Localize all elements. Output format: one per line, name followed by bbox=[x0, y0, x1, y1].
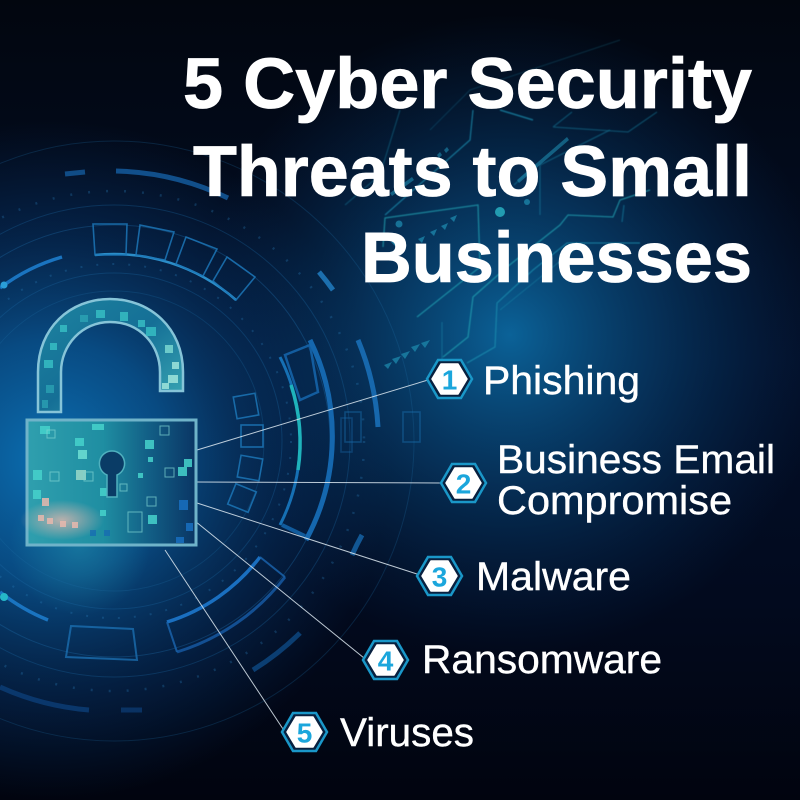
connector lines from lock to numbered badges bbox=[165, 380, 442, 729]
decorative concentric rings bbox=[0, 141, 414, 741]
icon: padlock bbox=[20, 299, 196, 545]
item 2: Business Email Compromise bbox=[441, 438, 775, 523]
item 4: Ransomware: 4 bbox=[378, 646, 394, 676]
padlock body bbox=[20, 420, 196, 545]
item 4: Ransomware: Ransomware bbox=[422, 638, 662, 682]
item 2: Business Email Compromise: Compromise bbox=[497, 479, 732, 523]
decorative arrowheads and nodes bbox=[384, 137, 569, 369]
title: 5 Cyber Security bbox=[183, 45, 753, 124]
item 2: Business Email Compromise: Business Email bbox=[497, 438, 775, 482]
keyhole bbox=[99, 451, 125, 497]
item 5: Viruses: 5 bbox=[297, 718, 312, 748]
title: Businesses bbox=[361, 219, 752, 298]
decorative trapezoid blocks bbox=[66, 224, 420, 660]
item 5: Viruses bbox=[282, 711, 474, 755]
item 1: Phishing: 1 bbox=[442, 364, 457, 396]
title: Threats to Small bbox=[193, 133, 752, 212]
item 5: Viruses: Viruses bbox=[340, 711, 474, 755]
item 2: Business Email Compromise: 2 bbox=[456, 468, 471, 500]
item 3: Malware: Malware bbox=[476, 555, 631, 599]
item 1: Phishing: Phishing bbox=[483, 359, 640, 403]
title bbox=[183, 45, 753, 298]
decorative circuit lines bbox=[345, 40, 657, 363]
item 3: Malware: 3 bbox=[432, 562, 447, 592]
padlock shackle bbox=[38, 299, 183, 412]
